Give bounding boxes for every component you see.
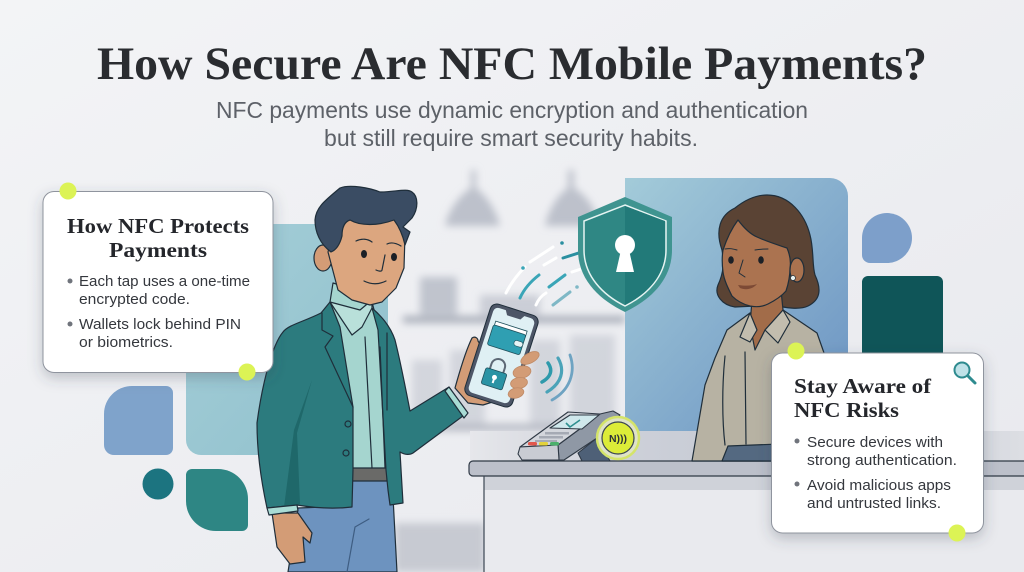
- customer jacket right and arm: [372, 308, 467, 505]
- cashier collar: [740, 310, 790, 343]
- customer neck and shirt: [330, 283, 387, 470]
- customer hair: [315, 186, 417, 252]
- panel heading: Payments: [109, 238, 207, 262]
- background panel: blue: [625, 178, 848, 431]
- fingers over phone edge: [507, 349, 541, 400]
- accent dot: [788, 342, 804, 360]
- icon: shield with keyhole: [578, 197, 672, 312]
- customer belt: [352, 468, 387, 481]
- customer eyes: [361, 250, 397, 261]
- panel: stay aware of NFC risks: [772, 342, 984, 542]
- customer ear: [314, 245, 332, 271]
- panel heading: Stay Aware of: [794, 374, 932, 398]
- hand holding phone: [455, 337, 515, 405]
- accent dot: [238, 364, 256, 380]
- panel bullets: [794, 434, 957, 512]
- cashier earring: [790, 276, 796, 280]
- decorative tile: dark teal block: [862, 276, 943, 366]
- blurred store background: [395, 170, 625, 572]
- icon: wallet: [487, 321, 527, 355]
- customer jacket left: [257, 302, 353, 508]
- panel heading: How NFC Protects: [67, 214, 249, 238]
- customer jacket shading: [284, 380, 312, 507]
- background band behind counter: [470, 431, 1024, 461]
- cashier blouse seams: [723, 352, 746, 445]
- subtitle: but still require smart security habits.: [324, 125, 698, 151]
- subtitle: NFC payments use dynamic encryption and authentication: [216, 97, 808, 123]
- counter: [469, 461, 1024, 572]
- panel bullets: or biometrics.: [79, 334, 173, 351]
- customer collar: [330, 300, 372, 335]
- customer lapel line: [322, 313, 387, 410]
- customer trouser crease: [347, 519, 369, 572]
- customer left hand: [272, 513, 312, 564]
- data arcs from phone to shield: [506, 241, 593, 305]
- panel bullets: strong authentication.: [807, 452, 957, 469]
- cashier blouse: [692, 310, 830, 461]
- terminal right wing: [558, 411, 620, 460]
- decorative tile: light teal panel: [186, 224, 388, 455]
- customer face: [328, 216, 405, 305]
- terminal stand: [578, 438, 610, 461]
- panel bullets: Secure devices with: [807, 434, 943, 451]
- panel bullets: Avoid malicious apps: [807, 477, 951, 494]
- cashier face: [722, 220, 790, 307]
- person: cashier: [692, 195, 830, 461]
- decorative tile: blue rounded square: [104, 386, 173, 455]
- accent dot: [948, 524, 966, 542]
- cashier ear: [790, 258, 804, 282]
- cashier neck: [750, 290, 783, 350]
- cashier lips: [738, 284, 757, 289]
- decorative tile: blue drop: [862, 213, 912, 263]
- customer brows, nose and smile: [356, 239, 401, 284]
- contactless waves near phone: [542, 355, 572, 400]
- panel bullets: Wallets lock behind PIN: [79, 316, 241, 333]
- panel bullets: [68, 273, 250, 351]
- icon: magnifying glass: [954, 362, 975, 383]
- panel heading: [794, 374, 932, 422]
- decorative dot: dark teal: [142, 468, 174, 500]
- cashier skirt: [722, 444, 780, 461]
- panel heading: NFC Risks: [794, 398, 899, 422]
- panel bullets: and untrusted links.: [807, 495, 941, 512]
- decorative tile: teal leaf: [186, 469, 248, 531]
- cashier eyes: [728, 256, 764, 264]
- panel bullets: encrypted code.: [79, 291, 190, 308]
- customer sleeve cuffs: [267, 387, 468, 515]
- panel bullets: Each tap uses a one-time: [79, 273, 250, 290]
- customer jacket buttons: [343, 421, 351, 456]
- phone: [463, 302, 540, 409]
- person: customer: [257, 186, 468, 572]
- NFC reader badge: N))): [609, 433, 627, 445]
- subtitle: [216, 97, 808, 151]
- panel heading: [67, 214, 249, 262]
- cashier brows, nose, mouth: [725, 249, 768, 277]
- icon: padlock: [481, 356, 511, 390]
- cashier back hair: [717, 195, 819, 308]
- panel: how NFC protects payments: [43, 182, 273, 380]
- terminal front slab: [518, 445, 559, 460]
- customer shirt placket: [365, 337, 385, 468]
- title: How Secure Are NFC Mobile Payments?: [97, 38, 927, 90]
- customer trousers: [288, 478, 397, 572]
- accent dot: [60, 182, 76, 200]
- payment terminal: [518, 411, 639, 461]
- terminal top face: [520, 412, 600, 447]
- terminal screen: [550, 415, 599, 429]
